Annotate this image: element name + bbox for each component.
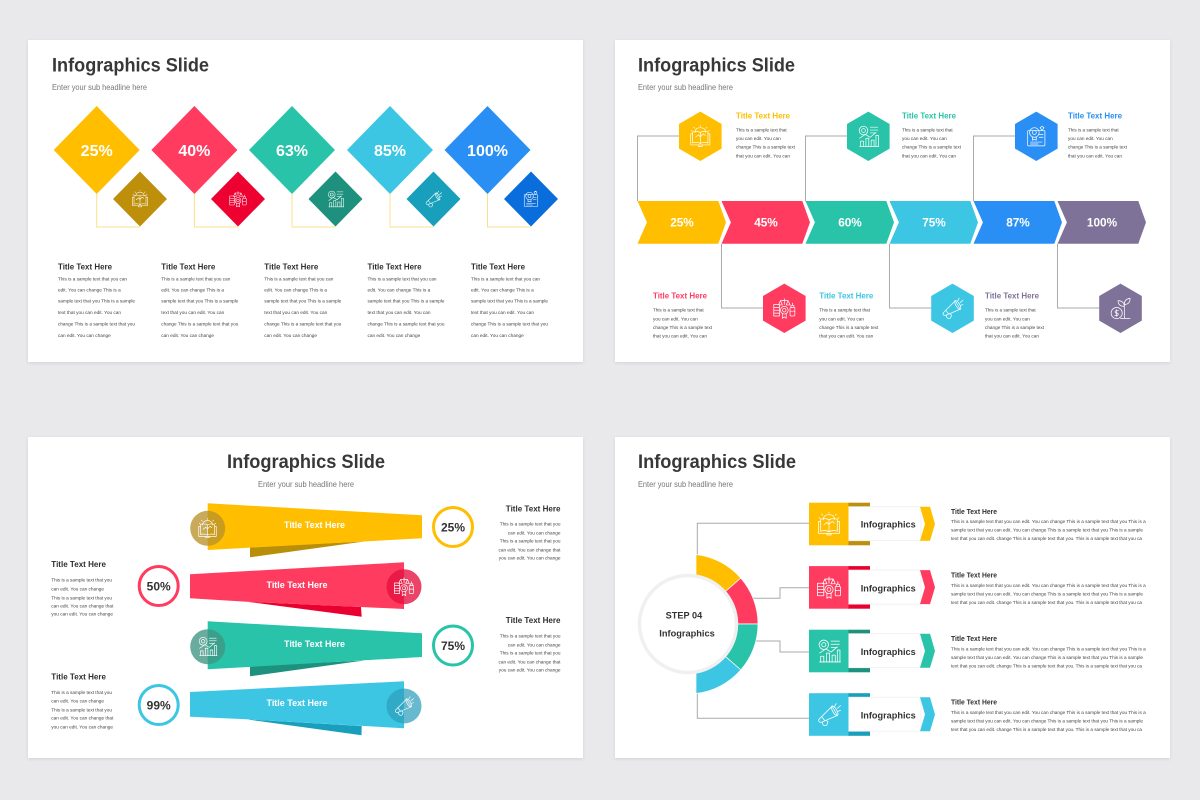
hexagon icon: law — [763, 284, 806, 333]
icon diamond: megaphone — [406, 172, 460, 226]
heading: Infographics Slide — [638, 451, 796, 473]
connector lines — [638, 136, 1100, 308]
bottom text 2: change This is a sample text — [819, 325, 879, 330]
text block 5: This is a sample text that you can — [471, 276, 540, 281]
text block 2: edit. You can change This is a — [161, 288, 224, 292]
card teal: Infographics — [861, 647, 916, 658]
text block 1: Title Text Here — [58, 261, 112, 271]
arc segment teal — [688, 624, 758, 670]
bottom text 2: Title Text Here — [819, 290, 874, 300]
text block 3: sample text that you This is a sample — [264, 299, 342, 304]
right text 1: can edit. You can change that — [498, 548, 561, 553]
top text 1: you can edit. You can — [736, 136, 781, 141]
card cyan: Infographics — [861, 710, 916, 722]
left text 1: Title Text Here — [51, 559, 106, 569]
chevron 75%: 75% — [922, 216, 946, 230]
text block 2: Title Text Here — [161, 261, 216, 271]
right text 1: can edit. You can change — [508, 530, 561, 535]
description 2: This is a sample text that you can edit. You can change This is a sample text that you This is a — [951, 583, 1146, 588]
top text 2: you can edit. You can — [902, 136, 947, 141]
ring 50% — [139, 566, 178, 606]
panel card — [28, 437, 583, 758]
ribbon yellow: Title Text Here — [284, 520, 345, 530]
description 4: Title Text Here — [951, 698, 997, 706]
text block 1: This is a sample text that you can — [58, 276, 127, 281]
hexagon icon: chart — [847, 112, 890, 161]
description 4: text that you can edit. change This is a sample text that you. This is a sample text that you ca — [951, 727, 1142, 732]
right text 1: you can edit. You can change — [499, 556, 561, 561]
heading: Infographics Slide — [52, 54, 209, 76]
right text 1: This is a sample text that you — [500, 522, 561, 527]
text block 3: text that you can edit. You can — [264, 310, 328, 315]
ring 75% — [434, 626, 472, 665]
text block 3: edit. You can change This is a — [264, 288, 327, 292]
description 1: text that you can edit. change This is a sample text that you. This is a sample text that you ca — [951, 536, 1142, 541]
left text 1 — [51, 559, 114, 617]
card yellow: Infographics — [861, 520, 916, 530]
card red: Infographics — [861, 583, 916, 594]
text block 5 — [471, 261, 548, 338]
text block 1: text that you can edit. You can — [58, 310, 121, 315]
icon diamond: document — [504, 172, 558, 226]
text block 4: text that you can edit. You can — [368, 310, 431, 315]
top text 1: change This is a sample text — [736, 145, 796, 150]
chevron 60% — [806, 201, 894, 244]
chevron 25% — [638, 201, 726, 244]
description 4: sample text that you can edit. You can change This is a sample text that you This is a sample — [951, 718, 1143, 724]
top text 2: Title Text Here — [902, 110, 956, 120]
connector lines — [697, 523, 810, 718]
top text 3: change This is a sample text — [1068, 145, 1128, 150]
chevron 75% — [890, 201, 978, 244]
hexagon icon: megaphone — [931, 284, 974, 333]
text block 3: can edit. You can change — [264, 333, 317, 338]
bottom text 1: you can edit. You can — [653, 316, 698, 321]
bottom text 1 — [653, 290, 713, 339]
text block 4: sample text that you This is a sample — [368, 299, 445, 304]
bottom text 2: that you can edit. You can — [819, 334, 874, 339]
ribbon red — [190, 562, 422, 617]
text block 3: change This is a sample text that you — [264, 322, 342, 327]
sub headline: Enter your sub headline here — [52, 82, 147, 92]
bottom text 1: change This is a sample text — [653, 325, 713, 330]
sub headline: Enter your sub headline here — [638, 82, 733, 92]
right text 2: you can edit. You can change — [499, 668, 561, 673]
left text 2: This is a sample text that you — [51, 690, 112, 695]
text block 1: can edit. You can change — [58, 333, 111, 338]
text block 5: change This is a sample text that you — [471, 322, 548, 327]
right text 2: This is a sample text that you — [500, 651, 561, 656]
diamond 63%: 63% — [276, 143, 308, 160]
panel: semicircle step slide — [615, 437, 1170, 758]
icon diamond: chart — [308, 172, 362, 226]
description 3: text that you can edit. change This is a sample text that you. This is a sample text that you ca — [951, 664, 1142, 668]
heading: Infographics Slide — [638, 54, 795, 76]
diamond 40%: 40% — [178, 143, 210, 160]
bottom text 3: Title Text Here — [985, 290, 1039, 300]
left text 1: This is a sample text that you — [51, 578, 112, 583]
center circle — [640, 576, 736, 672]
ribbon cyan: Title Text Here — [266, 698, 328, 708]
text block 4: Title Text Here — [368, 261, 422, 271]
hexagon icon: document — [1015, 112, 1058, 161]
hexagon icon: plant coin — [1099, 284, 1142, 333]
diamond 85%: 85% — [374, 143, 406, 160]
panel: chevron timeline slide — [615, 40, 1170, 362]
top text 2: that you can edit. You can — [902, 153, 956, 158]
ring 99% — [139, 686, 178, 724]
panel card — [615, 437, 1170, 758]
diamond 63% — [249, 106, 335, 194]
top text 3 — [1068, 110, 1128, 158]
description 1: This is a sample text that you can edit. You can change This is a sample text that you This is a — [951, 519, 1146, 524]
diamond 40% — [151, 106, 237, 194]
left text 2: This is a sample text that you — [51, 707, 112, 712]
description 1: sample text that you can edit. You can change This is a sample text that you This is a sample — [951, 528, 1143, 533]
text block 3 — [264, 261, 342, 338]
text block 2: This is a sample text that you can — [161, 276, 231, 281]
chevron 87%: 87% — [1006, 216, 1030, 230]
panel: ribbons slide — [28, 437, 583, 758]
ribbon cyan — [190, 681, 422, 735]
top text 3: that you can edit. You can — [1068, 153, 1122, 158]
description 3: Title Text Here — [951, 634, 997, 643]
arc segment cyan — [688, 624, 741, 694]
text block 5: text that you can edit. You can — [471, 310, 534, 315]
card red — [809, 566, 935, 609]
chevron 87% — [974, 201, 1062, 244]
card teal — [809, 630, 935, 672]
text block 2: text that you can edit. You can — [161, 310, 225, 315]
chevron 45%: 45% — [754, 216, 778, 230]
text block 4: can edit. You can change — [368, 333, 421, 338]
left text 2: Title Text Here — [51, 672, 106, 682]
heading: Infographics Slide — [227, 451, 385, 473]
top text 2 — [902, 110, 962, 158]
bottom text 3: you can edit. You can — [985, 316, 1030, 321]
diamond 100% — [444, 106, 530, 194]
top text 2: change This is a sample text — [902, 145, 962, 150]
right text 1 — [498, 503, 561, 561]
arc segment red — [688, 578, 758, 624]
chevron 45% — [722, 201, 810, 244]
left text 1: you can edit. You can change — [51, 612, 113, 617]
sub headline: Enter your sub headline here — [638, 479, 733, 489]
bottom text 2: you can edit. You can — [819, 316, 864, 321]
left text 1: This is a sample text that you — [51, 595, 112, 600]
left text 1: can edit. You can change that — [51, 604, 114, 609]
text block 3: Title Text Here — [264, 261, 319, 271]
ribbon red: Title Text Here — [266, 580, 328, 590]
bottom text 1: Title Text Here — [653, 290, 707, 300]
left text 2: can edit. You can change — [51, 699, 104, 704]
top text 2: This is a sample text that — [902, 127, 953, 132]
chevron 25%: 25% — [670, 216, 694, 230]
chevron 100% — [1058, 201, 1146, 244]
card cyan — [809, 693, 935, 736]
text block 3: This is a sample text that you can — [264, 276, 334, 281]
center circle: Infographics — [659, 628, 715, 638]
top text 3: you can edit. You can — [1068, 136, 1113, 141]
arc segment yellow — [688, 554, 741, 624]
left text 2: can edit. You can change that — [51, 716, 114, 721]
panel card — [615, 40, 1170, 362]
icon diamond: book — [113, 172, 167, 226]
bottom text 2 — [819, 290, 879, 339]
diamond 85% — [347, 106, 433, 194]
left text 2 — [51, 672, 114, 729]
diamond 100%: 100% — [467, 143, 508, 160]
text block 1 — [58, 261, 135, 338]
text block 2: can edit. You can change — [161, 333, 214, 338]
text block 4: This is a sample text that you can — [368, 276, 437, 281]
right text 1: This is a sample text that you — [500, 539, 561, 544]
right text 2: can edit. You can change — [508, 642, 561, 647]
top text 1: that you can edit. You can — [736, 153, 790, 158]
text block 5: sample text that you This is a sample — [471, 299, 548, 304]
chevron 60%: 60% — [838, 216, 862, 230]
top text 1: This is a sample text that — [736, 127, 787, 132]
text block 2 — [161, 261, 239, 338]
card yellow — [809, 503, 935, 545]
ring 99%: 99% — [147, 698, 171, 712]
left text 2: you can edit. You can change — [51, 724, 113, 729]
description 1: Title Text Here — [951, 507, 997, 516]
hexagon icon: book — [679, 112, 722, 161]
ribbon teal — [190, 621, 422, 676]
right text 1: Title Text Here — [506, 503, 561, 513]
top text 1 — [736, 110, 796, 158]
top text 1: Title Text Here — [736, 110, 790, 120]
ring 50%: 50% — [147, 579, 171, 593]
bottom text 3: that you can edit. You can — [985, 334, 1039, 339]
text block 2: sample text that you This is a sample — [161, 299, 239, 304]
right text 2: Title Text Here — [506, 615, 561, 625]
right text 2: This is a sample text that you — [500, 634, 561, 639]
text block 1: edit. You can change This is a — [58, 288, 121, 292]
bottom text 1: This is a sample text that — [653, 308, 704, 313]
description 3: sample text that you can edit. You can change This is a sample text that you This is a sample — [951, 655, 1143, 660]
text block 4: edit. You can change This is a — [368, 288, 431, 292]
ring 25% — [434, 508, 472, 546]
connector lines — [97, 194, 531, 227]
bottom text 2: This is a sample text that — [819, 308, 871, 313]
bottom text 3: This is a sample text that — [985, 308, 1036, 313]
description 4: This is a sample text that you can edit. You can change This is a sample text that you This is a — [951, 710, 1146, 715]
top text 3: This is a sample text that — [1068, 127, 1119, 132]
right text 2 — [498, 615, 561, 673]
text block 5: edit. You can change This is a — [471, 288, 534, 292]
icon diamond: law — [211, 172, 265, 226]
text block 1: change This is a sample text that you — [58, 322, 135, 327]
bottom text 3 — [985, 290, 1045, 339]
sub headline: Enter your sub headline here — [258, 479, 354, 489]
text block 5: Title Text Here — [471, 261, 525, 271]
description 3 — [951, 634, 1146, 668]
description 1 — [951, 507, 1146, 541]
ribbon teal: Title Text Here — [284, 639, 345, 649]
ring 25%: 25% — [441, 520, 465, 534]
text block 4 — [368, 261, 445, 338]
right text 2: can edit. You can change that — [498, 660, 561, 665]
ribbon yellow — [190, 503, 422, 557]
ring 75%: 75% — [441, 639, 465, 653]
diamond 25%: 25% — [81, 143, 113, 160]
left text 1: can edit. You can change — [51, 587, 104, 592]
description 3: This is a sample text that you can edit. You can change This is a sample text that you This is a — [951, 646, 1146, 651]
description 2: text that you can edit. change This is a sample text that you. This is a sample text that you ca — [951, 600, 1142, 605]
bottom text 3: change This is a sample text — [985, 325, 1045, 330]
top text 3: Title Text Here — [1068, 110, 1122, 120]
text block 5: can edit. You can change — [471, 333, 524, 338]
description 2: sample text that you can edit. You can change This is a sample text that you This is a sample — [951, 592, 1143, 597]
chevron 100%: 100% — [1087, 216, 1118, 230]
panel: diamonds slide — [28, 40, 583, 362]
description 4 — [951, 698, 1146, 732]
diamond 25% — [54, 106, 140, 194]
center circle: STEP 04 — [666, 610, 702, 620]
description 2 — [951, 571, 1146, 605]
bottom text 1: that you can edit. You can — [653, 334, 707, 339]
text block 4: change This is a sample text that you — [368, 322, 445, 327]
panel card — [28, 40, 583, 362]
text block 1: sample text that you This is a sample — [58, 299, 135, 304]
text block 2: change This is a sample text that you — [161, 322, 239, 327]
description 2: Title Text Here — [951, 571, 997, 580]
